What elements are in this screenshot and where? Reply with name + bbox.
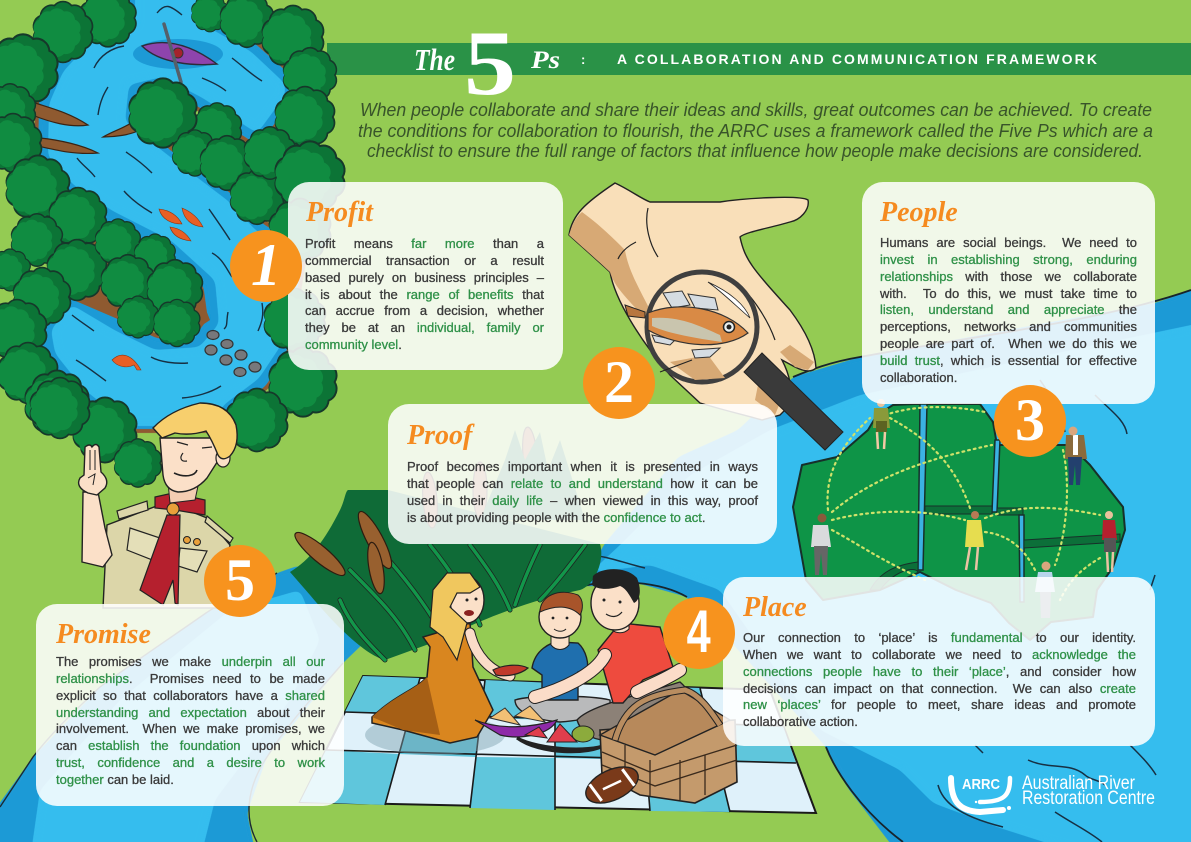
text block: People: perceptions, networks and communities [880, 319, 1137, 334]
text block: Profit: it is about the range of benefits that [305, 287, 544, 302]
text block: Place: Our connection to ‘place’ is fundamental to our identity. [743, 630, 1136, 645]
title: The [414, 42, 455, 77]
reeds [290, 426, 601, 660]
intro text: checklist to ensure the full range of factors that influence how people make decisions are considered. [367, 141, 1143, 161]
title [414, 12, 1097, 114]
number badge 3 [994, 385, 1066, 457]
text block: Profit: they be at an individual, family or [305, 320, 544, 335]
intro text [358, 100, 1153, 161]
intro text: the conditions for collaboration to flourish, the ARRC uses a framework called the Five Ps which are a [358, 121, 1153, 141]
picnic blanket [300, 676, 816, 813]
woman [372, 573, 528, 743]
text block: Place: new ‘places’ for people to meet, share ideas and promote [743, 697, 1136, 712]
title: Ps [530, 47, 560, 74]
number badge 1 [230, 230, 302, 302]
icon: hand holding fish with magnifying glass [569, 183, 843, 450]
panel: People [862, 182, 1155, 404]
food platter [475, 706, 605, 752]
orange fish [112, 208, 203, 370]
text block: People: Humans are social beings. We need to [880, 235, 1137, 250]
picnic basket [600, 690, 737, 803]
number badge 1: 1 [251, 232, 281, 298]
text block: People: listen, understand and appreciate the [880, 302, 1137, 317]
text block: Place: connections people have to their ‘place’, and consider how [743, 664, 1136, 679]
text block: Profit: Profit means far more than a [305, 236, 544, 251]
island fills [130, 100, 290, 230]
soft shadow beneath figures [365, 715, 505, 755]
text block: Place [742, 630, 1136, 729]
heading: Promise: Promise [56, 619, 151, 650]
text block: Promise: involvement. When we make promises, we [56, 721, 325, 736]
fallen logs [32, 102, 140, 153]
football [580, 760, 644, 810]
text block: Proof [407, 459, 758, 525]
heading: People: People [880, 197, 958, 228]
text block: People: relationships with those we collaborate [880, 269, 1137, 284]
ripples [72, 6, 263, 398]
intro text: When people collaborate and share their ideas and skills, great outcomes can be achieved. To create [360, 100, 1152, 120]
logo: ARRC: ARRC [962, 776, 1000, 793]
scout [79, 403, 237, 608]
text block: Promise: The promises we make underpin all our [56, 654, 325, 669]
text block: Promise: can establish the foundation upon which [56, 738, 325, 753]
title: : [581, 52, 585, 67]
text block: Promise: relationships. Promises need to be made [56, 671, 325, 686]
cattails [290, 426, 539, 595]
number badge 4 [663, 597, 735, 669]
text block: People: invest in establishing strong, enduring [880, 252, 1137, 267]
text block: People: with. To do this, we must take time to [880, 286, 1137, 301]
title: 5 [464, 12, 516, 114]
title: A COLLABORATION AND COMMUNICATION FRAMEWORK [617, 51, 1097, 67]
text block: People [880, 235, 1137, 385]
panel: Place [723, 577, 1155, 746]
lower left river [0, 565, 367, 842]
text block: Profit [305, 236, 544, 352]
text block: Profit: based purely on business principles – [305, 270, 544, 285]
boy [515, 592, 610, 722]
number badge 4: 4 [687, 598, 711, 665]
number badge 5: 5 [225, 547, 255, 613]
text block: Promise: understanding and expectation about their [56, 705, 325, 720]
text block: Profit: community level. [305, 337, 402, 352]
text block: Proof: Proof becomes important when it is presented in ways [407, 459, 758, 474]
number badge 5 [204, 545, 276, 617]
text block: Proof: is about providing people with the confidence to act. [407, 510, 706, 525]
text block: People: collaboration. [880, 370, 957, 385]
panel: Profit [288, 182, 563, 370]
number badge 2: 2 [604, 349, 634, 415]
fish [648, 291, 748, 358]
heading: Proof: Proof [407, 420, 472, 451]
text block: People: people are part of. When we do this we [880, 336, 1137, 351]
logo: ARRC: Restoration Centre [1022, 788, 1155, 809]
trees [0, 0, 345, 487]
number badge 3: 3 [1015, 387, 1045, 453]
stepping stones [205, 330, 261, 376]
text block: Place: collaborative action. [743, 714, 858, 729]
logo: ARRC: Australian River [1022, 773, 1136, 794]
people on map [811, 399, 1117, 618]
panel: Promise [36, 604, 344, 806]
Australia map with connected people [793, 399, 1125, 640]
text block: Proof: that people can relate to and understand how it can be [407, 476, 758, 491]
text block: Promise: together can be laid. [56, 772, 174, 787]
man [535, 569, 697, 740]
magnifier handle [744, 353, 843, 450]
text block: Place: When we want to collaborate we need to acknowledge the [743, 647, 1136, 662]
canoe [133, 24, 223, 82]
lower right water [580, 282, 1191, 842]
text block: Profit: can accrue from a decision, whether [305, 303, 544, 318]
text block: Promise: trust, confidence and a desire to work [56, 755, 325, 770]
panel: Proof [388, 404, 777, 544]
upper river [32, 0, 300, 425]
heading: Place: Place [743, 592, 807, 623]
text block: Proof: used in their daily life – when viewed in this way, proof [407, 493, 758, 508]
text block: Profit: commercial transaction or a result [305, 253, 544, 268]
text block: Promise [56, 654, 326, 787]
ghost seed heads behind panel [480, 430, 585, 520]
header band [327, 43, 1191, 75]
logo: ARRC [951, 773, 1155, 812]
text block: People: build trust, which is essential for effective [880, 353, 1137, 368]
text block: Place: decisions can impact on that connection. We can also create [743, 681, 1136, 696]
text block: Promise: explicit so that collaborators have a shared [56, 688, 325, 703]
heading: Profit: Profit [306, 197, 373, 228]
number badge 2 [583, 347, 655, 419]
